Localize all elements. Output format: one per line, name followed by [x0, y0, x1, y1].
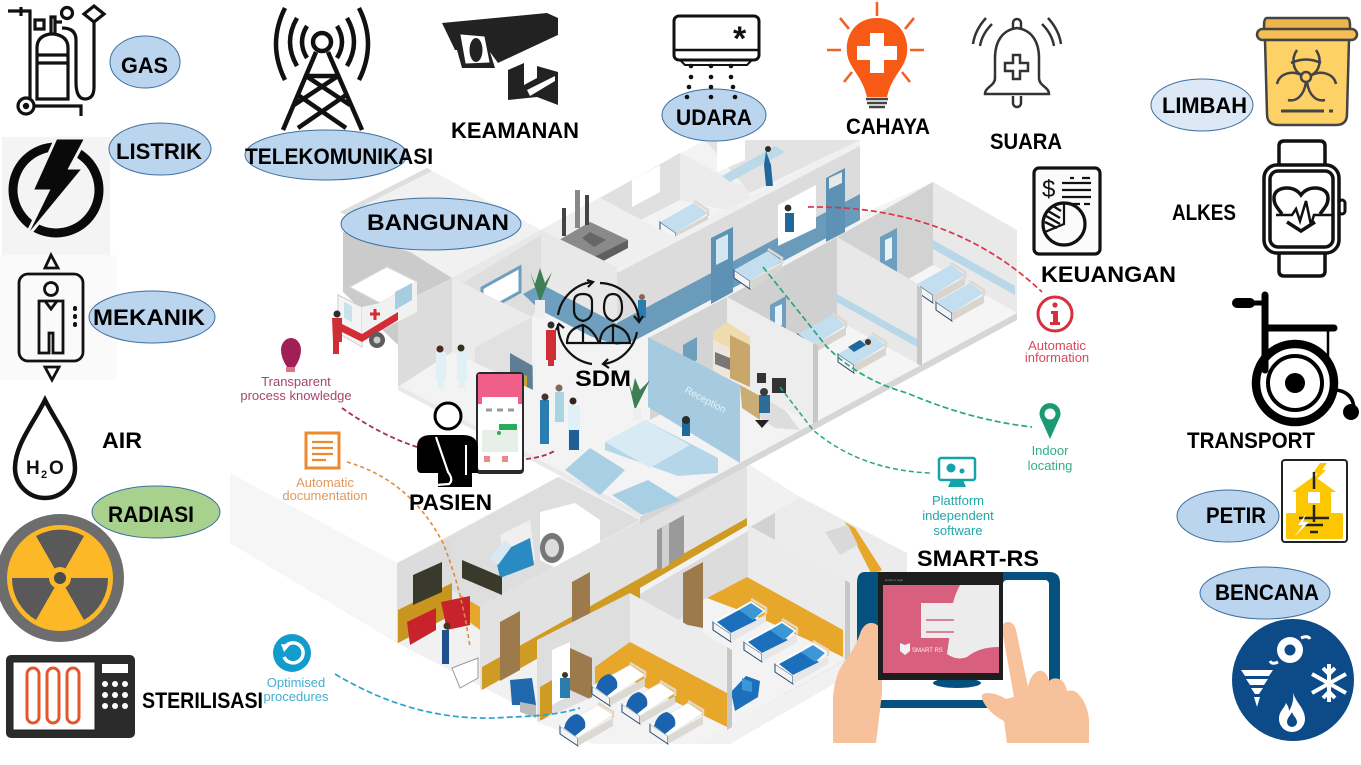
icon: water drop: 2: [41, 469, 47, 481]
label: SMART-RS: SMART-RS: [917, 546, 1039, 571]
ellipse label: LISTRIK: [109, 123, 211, 175]
annotation: indoor locating: Indoor: [1032, 443, 1069, 458]
ellipse label: LIMBAH: [1151, 79, 1253, 131]
annotation: automatic information: Automatic: [1028, 338, 1086, 353]
ellipse label: TELEKOMUNIKASI: TELEKOMUNIKASI: [245, 144, 433, 169]
icon: telecom tower: [276, 8, 368, 130]
icon: water drop: H: [26, 458, 40, 479]
illustration: upper floor of the hospital: [332, 140, 1017, 524]
tablet with SMART-RS screen and hands: [833, 572, 1089, 743]
ellipse label: GAS: GAS: [121, 53, 168, 78]
annotation: transparent process knowledge: [240, 338, 352, 403]
label: TRANSPORT: TRANSPORT: [1187, 428, 1316, 453]
annotation: transparent process knowledge: process knowledge: [240, 388, 352, 403]
ellipse label: RADIASI: RADIASI: [108, 502, 194, 527]
ellipse label: BANGUNAN: [341, 198, 521, 250]
ellipse label: BENCANA: [1200, 567, 1330, 619]
icon: light bulb: [827, 2, 924, 107]
ellipse label: UDARA: [662, 89, 766, 141]
label: SUARA: SUARA: [990, 129, 1062, 154]
icon: lightning protection: [1282, 460, 1347, 542]
label: ALKES: ALKES: [1172, 200, 1236, 225]
ellipse label: MEKANIK: MEKANIK: [93, 305, 205, 330]
annotation: automatic documentation: documentation: [282, 488, 368, 503]
icon: water drop: O: [49, 458, 64, 479]
icon: water drop: [15, 400, 75, 498]
dashed connector: automatic information: [808, 207, 1042, 292]
annotation: platform independent software: Plattform: [932, 493, 984, 508]
dashed connector: optimised procedures: [335, 674, 580, 718]
dashed connector: indoor locating: [763, 267, 1032, 427]
annotation: platform independent software: independent: [922, 508, 994, 523]
annotation: optimised procedures: Optimised: [267, 675, 325, 690]
icon: gas cylinder trolley: [8, 6, 104, 116]
icon: alarm bell: [973, 18, 1061, 107]
ellipse label: GAS: [110, 36, 180, 88]
icon: air conditioner: [674, 16, 759, 65]
icon: steriliser oven: [6, 655, 135, 738]
icon: disasters badge: [1232, 619, 1354, 741]
icon: elevator: [0, 255, 117, 380]
icon: finance report: $: [1042, 176, 1055, 203]
ellipse label: UDARA: UDARA: [676, 105, 752, 130]
ellipse label: LISTRIK: LISTRIK: [116, 139, 202, 164]
air conditioner droplets: [685, 64, 737, 99]
annotation: platform independent software: software: [933, 523, 983, 538]
annotation: automatic information: information: [1025, 350, 1089, 365]
icon: medical staff: [556, 280, 643, 368]
icon: wheelchair: [1235, 295, 1359, 422]
ellipse label: BENCANA: BENCANA: [1215, 580, 1319, 605]
label: KEAMANAN: KEAMANAN: [451, 118, 579, 143]
label: CAHAYA: CAHAYA: [846, 114, 930, 139]
annotation: optimised procedures: [263, 634, 329, 704]
icon: patient: [417, 403, 478, 487]
label: PASIEN: PASIEN: [409, 490, 492, 515]
annotation: automatic information: [1025, 297, 1089, 365]
icon: security camera: [442, 13, 558, 105]
tablet with SMART-RS screen and hands: SMART RS: [912, 648, 943, 654]
illustration: upper floor of the hospital: Reception: [683, 385, 728, 416]
annotation: automatic documentation: Automatic: [296, 475, 354, 490]
ellipse label: BANGUNAN: BANGUNAN: [367, 210, 509, 235]
icon: radiation: [0, 514, 124, 642]
annotation: indoor locating: locating: [1028, 458, 1072, 473]
ellipse label: PETIR: PETIR: [1206, 503, 1266, 528]
ellipse label: TELEKOMUNIKASI: [245, 130, 433, 180]
ellipse label: PETIR: [1177, 490, 1279, 542]
label: STERILISASI: STERILISASI: [142, 688, 263, 713]
dashed connector: transparent process knowledge: [342, 408, 556, 459]
ellipse label: MEKANIK: [89, 291, 215, 343]
annotation: automatic documentation: [282, 433, 368, 503]
dashed connector: platform software: [780, 387, 930, 473]
annotation: platform independent software: [922, 458, 994, 538]
label: KEUANGAN: KEUANGAN: [1041, 262, 1176, 287]
phone: patient application: [476, 372, 524, 474]
ambulance: [332, 267, 417, 354]
label: SDM: SDM: [575, 366, 631, 391]
label: AIR: AIR: [102, 428, 142, 453]
icon: biohazard waste bin: [1257, 18, 1357, 125]
annotation: optimised procedures: procedures: [263, 689, 329, 704]
dashed connector: automatic documentation: [347, 462, 470, 647]
tablet with SMART-RS screen and hands: smart-rs login: [885, 578, 904, 582]
illustration: lower floor of the hospital: [230, 463, 907, 746]
icon: smart watch: [1264, 141, 1345, 276]
annotation: indoor locating: [1028, 403, 1072, 473]
icon: electricity bolt: [2, 137, 110, 259]
icon: air conditioner: *: [733, 20, 747, 58]
ellipse label: RADIASI: [92, 486, 220, 538]
ellipse label: LIMBAH: LIMBAH: [1162, 93, 1247, 118]
icon: finance report: [1034, 168, 1100, 254]
annotation: transparent process knowledge: Transparent: [261, 374, 331, 389]
